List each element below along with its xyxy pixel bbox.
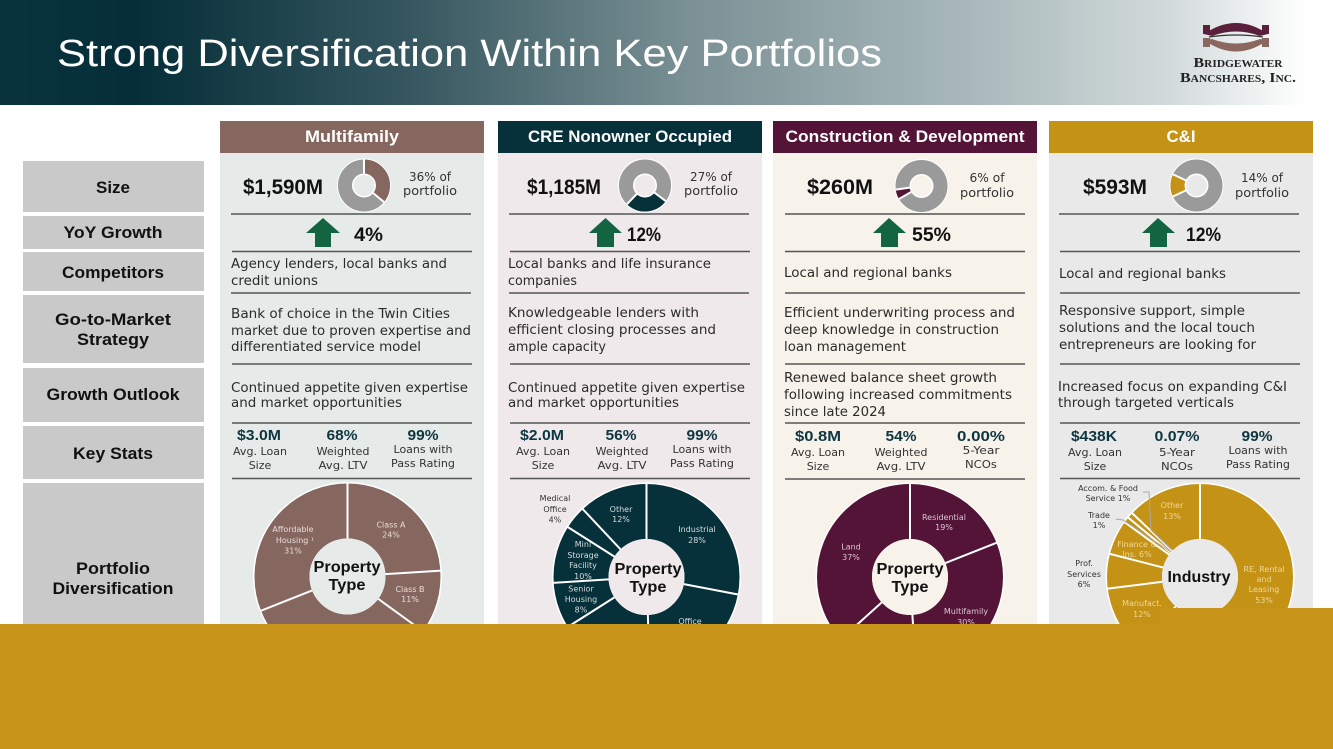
portfolio share text: portfolio [684, 184, 738, 198]
icon: portfolio share donut 6% [894, 159, 948, 213]
donut chart: industry [1106, 482, 1294, 672]
portfolio share text: portfolio [1235, 186, 1289, 200]
chart labels: Housing [565, 595, 597, 604]
key stats: Avg. Loan [233, 445, 287, 458]
icon: portfolio share donut 14% [1170, 158, 1224, 212]
donut chart: property type [253, 482, 442, 671]
icon: growth arrow [589, 218, 622, 247]
chart labels: Land [841, 542, 861, 552]
go-to-market text: deep knowledge in construction [784, 323, 999, 338]
go-to-market text [231, 307, 471, 355]
competitors text: Local and regional banks [784, 266, 952, 281]
portfolio share text: portfolio [960, 186, 1014, 200]
key stats: Pass Rating [670, 457, 734, 470]
header banner [0, 0, 1333, 105]
key stats: $0.8M [795, 428, 841, 445]
growth outlook text: since late 2024 [784, 405, 886, 420]
chart labels: 28% [688, 536, 706, 545]
chart center label: Type [630, 579, 667, 596]
chart labels: Other [1161, 501, 1184, 510]
heading: Construction & Development: Construction & Development [786, 127, 1025, 146]
icon: growth arrow [873, 218, 906, 247]
key stats [233, 427, 455, 472]
logo: Bridgewater Bancshares [1180, 23, 1296, 86]
key stats: Size [532, 459, 555, 472]
chart center label: Type [892, 579, 929, 596]
go-to-market text: solutions and the local touch [1059, 321, 1255, 336]
key stats: 54% [886, 428, 916, 445]
size amount: $593M [1083, 176, 1147, 199]
size amount: $1,185M [527, 176, 601, 199]
key stats: 68% [326, 427, 358, 444]
chart labels: 10% [574, 572, 592, 581]
key stats: Loans with [672, 443, 732, 456]
key stats: 99% [408, 427, 438, 444]
competitors text: companies [508, 274, 577, 289]
key stats: Weighted [316, 445, 370, 458]
size amount: $1,590M [243, 176, 323, 199]
key stats: Size [1084, 460, 1107, 473]
go-to-market text: differentiated service model [231, 340, 421, 355]
chart labels: 13% [1163, 512, 1181, 521]
chart center label: Type [328, 577, 366, 594]
growth outlook text: Renewed balance sheet growth [784, 371, 997, 386]
logo: Bridgewater Bancshares: Bancshares, Inc. [1180, 71, 1296, 86]
portfolio share text [403, 170, 457, 198]
chart labels: 1% [1093, 521, 1106, 530]
heading: C&I [1049, 121, 1313, 153]
chart labels: Housing ¹ [276, 536, 314, 545]
title: Strong Diversification Within Key Portfolios [57, 33, 882, 75]
chart labels: 37% [842, 553, 860, 562]
chart labels: 4% [549, 516, 562, 524]
row label: Growth Outlook [23, 368, 204, 422]
key stats: 5-Year [1159, 446, 1196, 459]
chart labels: Facility [569, 561, 597, 570]
key stats: Weighted [874, 446, 928, 459]
chart center label: Property [614, 561, 682, 578]
competitors text [508, 257, 711, 289]
go-to-market text [1059, 304, 1257, 353]
row label: Portfolio Diversification: Portfolio [76, 560, 150, 578]
chart labels: 30% [957, 618, 975, 627]
chart labels: 19% [935, 523, 953, 532]
key stats [791, 428, 1005, 473]
footer band [0, 608, 1333, 749]
key stats: Size [249, 459, 272, 472]
chart labels: 12% [612, 515, 630, 524]
donut chart: property type [552, 482, 741, 672]
key stats: NCOs [1161, 460, 1193, 473]
key stats: Weighted [596, 445, 648, 458]
portfolio share text: 27% of [690, 170, 733, 184]
growth outlook text [1058, 380, 1287, 411]
chart labels: Class A [376, 520, 406, 530]
size amount: $260M [807, 176, 873, 199]
go-to-market text: loan management [784, 340, 906, 355]
chart labels [841, 513, 988, 627]
key stats: 99% [686, 427, 718, 444]
key stats: Avg. Loan [791, 446, 845, 459]
growth outlook text: Continued appetite given expertise [231, 381, 468, 396]
chart labels: Office [678, 617, 702, 626]
key stats: Avg. LTV [318, 459, 368, 472]
growth outlook text: Continued appetite given expertise [508, 381, 745, 396]
competitors text: Agency lenders, local banks and [231, 257, 447, 272]
chart labels: Class B [395, 585, 425, 594]
growth outlook text: Increased focus on expanding C&I [1058, 380, 1287, 395]
key stats [516, 427, 734, 472]
key stats: Loans with [394, 443, 453, 456]
chart labels: 24% [382, 530, 400, 540]
row label: Competitors: Competitors [62, 264, 164, 282]
row label: Key Stats [23, 426, 204, 479]
key stats: $3.0M [237, 427, 281, 444]
key stats: Loans with [1228, 444, 1288, 457]
key stats: 0.00% [957, 428, 1005, 445]
chart labels: Mini [575, 540, 591, 549]
chart labels: RE, Rental [1243, 565, 1285, 574]
go-to-market text [784, 306, 1015, 355]
growth outlook text: through targeted verticals [1058, 396, 1234, 411]
chart labels: and [1256, 575, 1272, 584]
heading: C&I: C&I [1166, 127, 1196, 146]
key stats: $438K [1071, 428, 1117, 445]
panel: Multifamily [220, 121, 484, 671]
chart center label: Property [314, 559, 381, 576]
key stats: Size [807, 460, 830, 473]
chart labels: Service 1% [1086, 494, 1131, 503]
key stats [1068, 428, 1290, 473]
key stats: Pass Rating [391, 457, 455, 470]
chart labels: Manufact. [1122, 599, 1162, 608]
chart labels: Other [610, 505, 633, 514]
growth outlook text: and market opportunities [508, 396, 679, 411]
go-to-market text: Efficient underwriting process and [784, 306, 1015, 321]
icon: growth arrow [1142, 218, 1175, 247]
chart labels: Residential [922, 513, 966, 522]
chart center label [876, 561, 944, 596]
chart labels: Services [1067, 570, 1101, 579]
go-to-market text: market due to proven expertise and [231, 324, 471, 339]
YoY growth value: 55% [912, 225, 951, 246]
row label: YoY Growth: YoY Growth [64, 224, 162, 242]
competitors text: Local and regional banks [1059, 267, 1226, 282]
chart labels: Leasing [1249, 585, 1279, 594]
row label: Go-to-Market Strategy: Go-to-Market [55, 311, 172, 329]
key stats: Avg. Loan [1068, 446, 1122, 459]
portfolio share text [960, 171, 1014, 200]
portfolio share text: 36% of [409, 170, 452, 184]
key stats: Avg. Loan [516, 445, 570, 458]
go-to-market text: Responsive support, simple [1059, 304, 1245, 319]
row label: Go-to-Market Strategy: Strategy [77, 331, 150, 349]
logo: Bridgewater Bancshares: Bridgewater [1194, 56, 1283, 71]
key stats: NCOs [965, 458, 997, 471]
chart labels: Finance & [1117, 540, 1157, 549]
icon: portfolio share donut 27% [618, 158, 672, 212]
go-to-market text: ample capacity [508, 340, 606, 355]
row label: Competitors [23, 252, 204, 291]
chart labels: Affordable [272, 525, 314, 534]
leader lines [1116, 492, 1172, 552]
chart labels: Storage [567, 551, 599, 560]
chart labels: Office [543, 505, 567, 514]
chart labels: Medical [540, 494, 570, 503]
row label: Size: Size [96, 179, 130, 197]
chart center label [314, 559, 381, 594]
row label: Growth Outlook: Growth Outlook [46, 386, 180, 404]
heading: CRE Nonowner Occupied: CRE Nonowner Occupied [528, 127, 732, 146]
panel: CRE Nonowner Occupied [498, 121, 762, 672]
chart labels: 53% [1255, 596, 1273, 605]
row label: Portfolio Diversification: Diversification [52, 580, 174, 598]
growth outlook text [231, 381, 468, 411]
portfolio share text: portfolio [403, 184, 457, 198]
heading: CRE Nonowner Occupied [498, 121, 762, 153]
chart labels: 6% [1078, 580, 1091, 589]
chart center label: Industry [1168, 569, 1231, 586]
growth outlook text [784, 371, 1012, 420]
key stats: 0.07% [1154, 428, 1200, 445]
growth outlook text: and market opportunities [231, 396, 402, 411]
row labels column [23, 161, 204, 624]
go-to-market text: Bank of choice in the Twin Cities [231, 307, 450, 322]
portfolio share text [684, 170, 738, 198]
chart labels: Senior [568, 584, 594, 594]
key stats: 99% [1242, 428, 1272, 445]
key stats: 5-Year [962, 444, 1000, 457]
donut chart: property type [816, 482, 1004, 672]
go-to-market text: entrepreneurs are looking for [1059, 338, 1257, 353]
chart labels [1067, 484, 1285, 619]
chart labels: 11% [401, 595, 419, 604]
chart center label: Property [876, 561, 944, 578]
icon: growth arrow [306, 218, 340, 247]
row label: Portfolio Diversification [23, 483, 204, 624]
chart labels [272, 520, 425, 604]
key stats: 56% [606, 427, 636, 444]
heading: Multifamily [220, 121, 484, 153]
panel: C&I [1049, 121, 1313, 672]
row label: Go-to-Market Strategy [23, 295, 204, 363]
go-to-market text [508, 306, 716, 355]
YoY growth value: 12% [1186, 225, 1221, 246]
chart labels: Ins. 6% [1122, 550, 1152, 559]
chart labels: 12% [1133, 610, 1151, 619]
row label: Key Stats: Key Stats [73, 445, 153, 463]
competitors text: credit unions [231, 274, 318, 289]
go-to-market text: Knowledgeable lenders with [508, 306, 699, 321]
YoY growth value: 12% [627, 225, 661, 246]
chart labels: Prof. [1075, 559, 1093, 568]
growth outlook text [508, 381, 745, 411]
row label: YoY Growth [23, 216, 204, 249]
chart labels: 31% [284, 546, 302, 556]
competitors text [231, 257, 447, 289]
growth outlook text: following increased commitments [784, 388, 1012, 403]
YoY growth value: 4% [354, 225, 383, 246]
key stats: Avg. LTV [598, 459, 647, 472]
chart labels: Accom. & Food [1078, 484, 1138, 493]
heading: Multifamily: Multifamily [305, 127, 400, 146]
portfolio share text: 14% of [1241, 171, 1284, 185]
competitors text: Local banks and life insurance [508, 257, 711, 272]
chart center label [614, 561, 682, 596]
panel: Construction & Development [773, 121, 1037, 672]
go-to-market text: efficient closing processes and [508, 323, 716, 338]
row label: Size [23, 161, 204, 212]
chart labels: Multifamily [944, 607, 988, 616]
chart labels: 8% [575, 606, 588, 614]
portfolio share text: 6% of [970, 171, 1005, 185]
chart labels: Trade [1087, 511, 1110, 520]
key stats: Pass Rating [1226, 458, 1290, 471]
portfolio share text [1235, 171, 1289, 200]
key stats: Avg. LTV [876, 460, 926, 473]
chart labels [540, 494, 716, 626]
icon: portfolio share donut 36% [337, 158, 391, 212]
heading: Construction & Development [773, 121, 1037, 153]
chart labels: Industrial [678, 525, 716, 534]
key stats: $2.0M [520, 427, 564, 444]
